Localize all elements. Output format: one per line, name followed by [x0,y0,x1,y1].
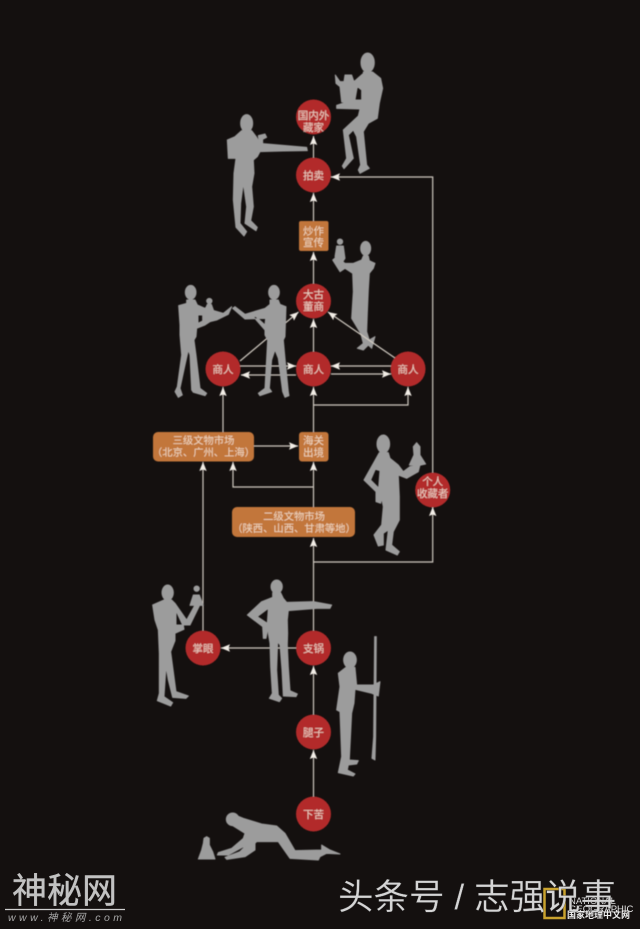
box: secondary market: （陕西、山西、甘肃等地） [232,522,356,535]
figure: runner with pole [337,637,380,776]
box: secondary market: 二级文物市场 [263,510,325,523]
node: digger [296,796,331,832]
node: runner [296,714,331,750]
arrow: secondary market to tertiary market [233,462,314,487]
node: left dealer [206,352,240,386]
arrow: middle dealer to big dealer [312,319,314,352]
arrow: auction to collectors [312,136,314,158]
watermark: site logo [5,872,125,924]
arrow: middle dealer to left dealer [241,374,296,376]
figure: private collector with statue [364,435,426,555]
logo: National Geographic [544,889,634,920]
figure: dealer reaching out [233,285,289,397]
arrow: runner to financier [312,666,314,715]
arrow: left dealer to big dealer [240,312,298,361]
box: customs: 海关 [303,434,324,447]
arrow: financier to appraiser [221,647,296,649]
node: auction [296,158,331,192]
arrow: secondary market to customs [312,462,314,507]
figure: auctioneer pointing [227,115,307,236]
arrow: right dealer to big dealer [328,312,395,358]
node: right dealer [390,352,426,386]
logo: National Geographic: NATIONAL [569,896,616,907]
node: big antique dealer [296,284,331,318]
figure: financier pointing [247,580,332,702]
box: secondary market [232,507,356,537]
figure: appraiser with statue [153,585,203,706]
arrow: tertiary market to left dealer [222,387,224,432]
box: tertiary market: （北京、广州、上海） [152,446,255,459]
diagram [152,53,450,860]
arrow: big dealer to hype [312,252,314,284]
arrow: tertiary market to customs [254,445,298,447]
arrow: right dealer to middle dealer [331,365,391,367]
node: overseas collectors: 国内外 [298,109,330,122]
node: private collector: 个人 [422,476,444,488]
arrow: customs to middle dealer [312,387,314,432]
node: financier: 支锅 [303,643,324,655]
node: private collector [415,472,450,508]
figure: standing collector behind right arrow [333,239,375,350]
arrow: appraiser to tertiary market [202,462,204,631]
figure: dealer offering statue [175,285,232,397]
box: hype: 宣传 [303,236,324,249]
node: auction: 拍卖 [303,169,324,182]
node: runner: 腿子 [303,727,324,739]
arrow: financier line to private collector [314,507,433,562]
figure: seated collector with statue [335,53,383,173]
logo: National Geographic: 国家地理中文网 [567,909,630,920]
watermark: site logo: www.神秘网.com [8,912,122,924]
node: big antique dealer: 大古 [303,288,324,301]
arrow: private collector to auction [331,177,433,473]
arrow: digger to runner [312,750,314,797]
arrow: left dealer to middle dealer [240,365,296,367]
figure: digger crawling with buddha [198,813,340,860]
box: hype: 炒作 [303,226,324,238]
node: right dealer: 商人 [398,363,419,376]
box: hype [299,221,328,251]
watermark: site logo: 神秘网 [12,872,117,911]
box: customs: 出境 [303,446,324,459]
box: customs [299,432,328,462]
watermark: toutiao account: 头条号 / 志强说事 [338,877,616,917]
node: financier [296,630,331,666]
arrow: middle dealer to right dealer [331,373,391,375]
node: overseas collectors: 藏家 [303,121,324,134]
node: appraiser: 掌眼 [192,642,214,655]
node: digger: 下苦 [303,808,324,821]
box: tertiary market: 三级文物市场 [173,434,234,447]
arrow: financier to secondary market [312,538,314,631]
node: big antique dealer: 董商 [303,300,324,313]
arrow: customs line to right dealer [314,387,408,405]
node: middle dealer [296,352,331,386]
node: appraiser [186,630,220,666]
node: private collector: 收藏者 [417,487,448,500]
node: overseas collectors [296,100,331,134]
flow arrows [203,136,433,797]
node: left dealer: 商人 [212,363,234,376]
box: tertiary market [152,432,255,462]
arrow: hype to auction [312,193,314,221]
logo: National Geographic: GEOGRAPHIC [569,904,634,915]
node: middle dealer: 商人 [303,363,324,376]
